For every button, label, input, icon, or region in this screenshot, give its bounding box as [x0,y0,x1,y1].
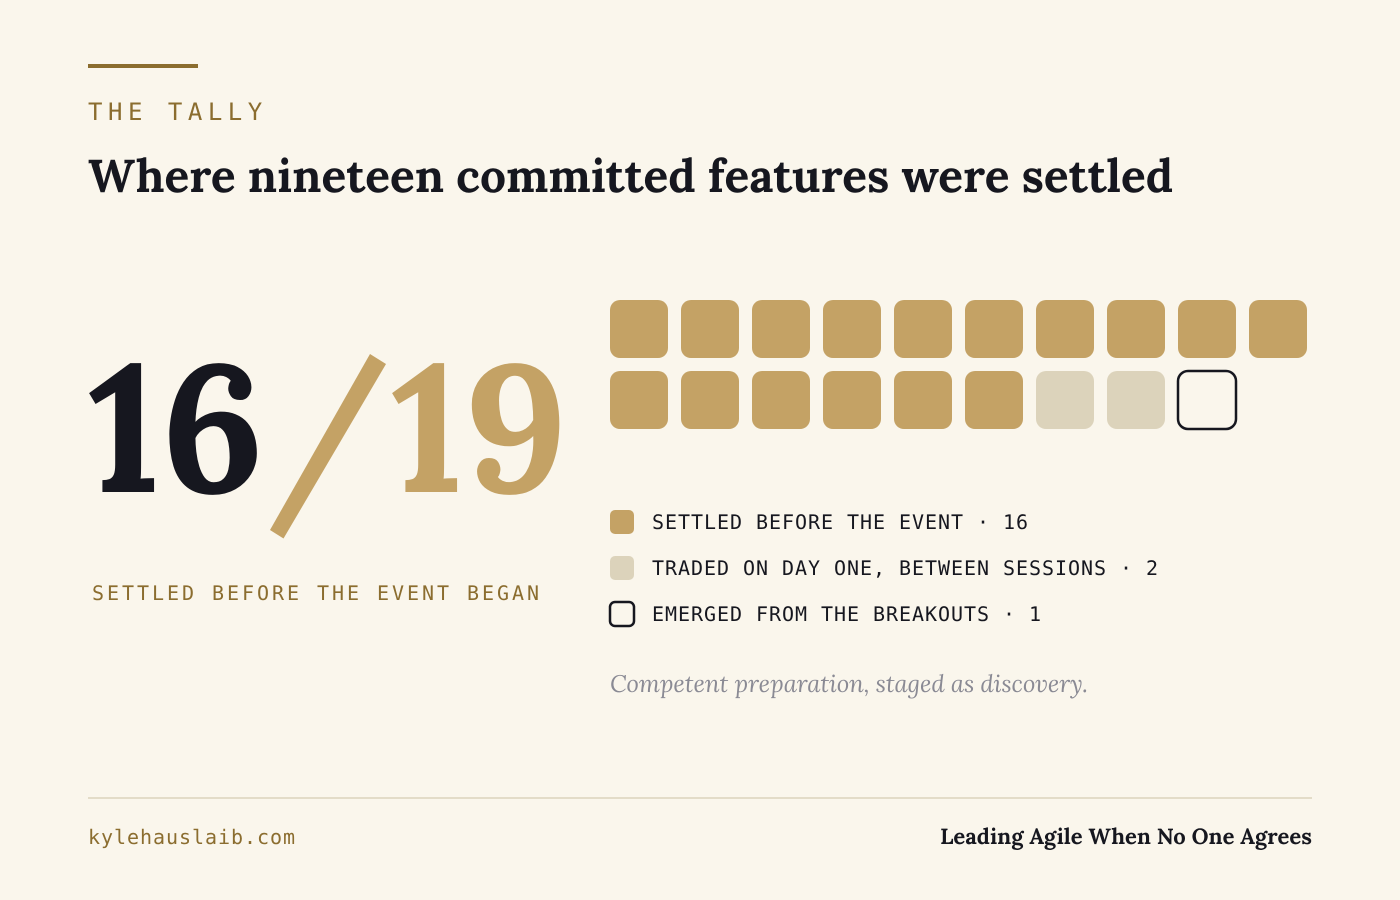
big number: 19: 19 [391,312,568,542]
slash [270,354,386,538]
title: Where nineteen committed features were settled [88,146,1173,205]
big number: 16: 16 [88,312,265,542]
eyebrow label: THE TALLY [88,98,268,126]
open square [1176,370,1238,430]
italic note: Competent preparation, staged as discovery. [610,668,1088,699]
unit grid [610,300,1307,430]
legend swatch: traded [610,556,634,580]
caption under number: SETTLED BEFORE THE EVENT BEGAN [92,581,542,605]
accent rule [88,64,198,68]
legend swatch: emerged [608,600,636,628]
footer rule [88,797,1312,799]
legend text: traded: TRADED ON DAY ONE, BETWEEN SESSIONS · 2 [652,556,1159,580]
footer book title: Leading Agile When No One Agrees [940,823,1312,851]
footer site: kylehauslaib.com [88,825,296,849]
legend swatch: settled [610,510,634,534]
legend text: emerged: EMERGED FROM THE BREAKOUTS · 1 [652,602,1042,626]
legend text: settled: SETTLED BEFORE THE EVENT · 16 [652,510,1029,534]
